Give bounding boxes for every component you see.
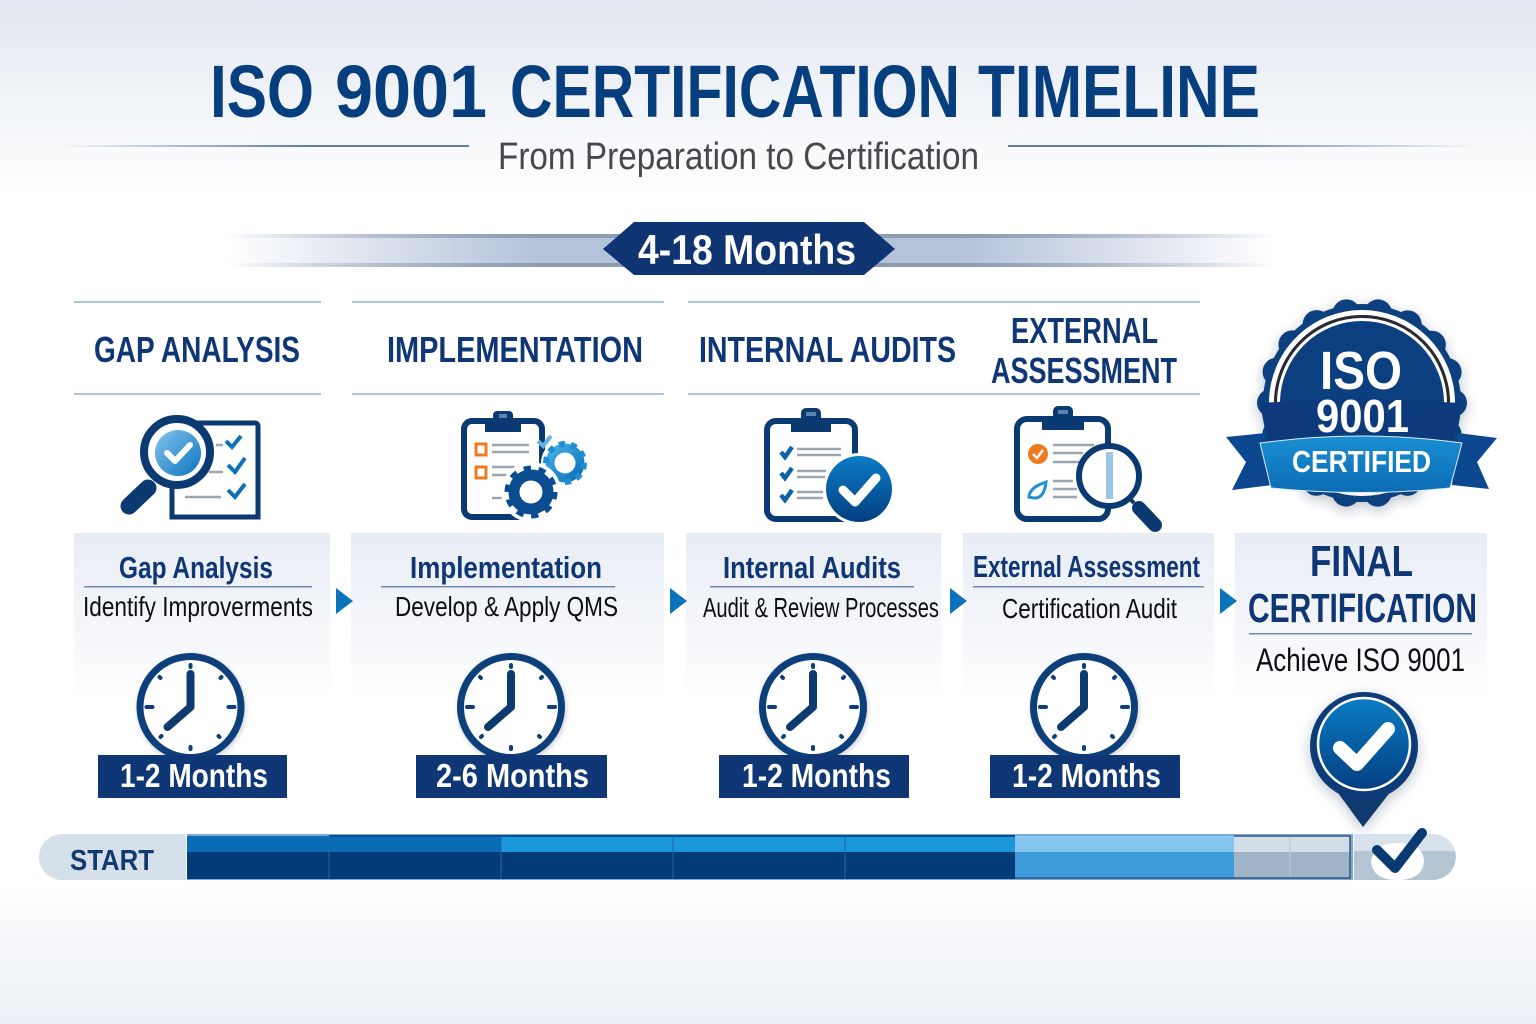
panel: implementation: Implementation <box>410 550 602 585</box>
panel: implementation: Develop & Apply QMS <box>395 591 618 622</box>
panel: internal audits: Internal Audits <box>723 550 901 585</box>
total duration banner <box>225 222 1275 275</box>
clock and duration: gap analysis <box>98 656 287 798</box>
clock and duration: external assessment: 1-2 Months <box>1012 757 1161 794</box>
panel: gap analysis <box>74 533 330 703</box>
subtitle: From Preparation to Certification <box>498 136 979 178</box>
panel: gap analysis: Gap Analysis <box>119 550 273 585</box>
icon: clipboard with gears <box>464 411 589 522</box>
clock and duration: internal audits: 1-2 Months <box>742 757 891 794</box>
heading: external assessment: EXTERNAL <box>1011 310 1158 351</box>
panel: external assessment: Certification Audit <box>1002 593 1177 624</box>
title: ISO <box>210 50 314 133</box>
title: 9001 <box>335 50 487 133</box>
icon: location pin with check <box>1310 692 1418 827</box>
clock and duration: implementation: 2-6 Months <box>436 757 589 794</box>
seal text: 9001: 9001 <box>1316 390 1409 442</box>
icon: clipboard with check badge <box>767 408 895 525</box>
heading: implementation: IMPLEMENTATION <box>387 329 643 370</box>
arrow 4 <box>1220 588 1237 614</box>
clock and duration: external assessment <box>990 656 1180 798</box>
bar segments <box>187 834 1353 880</box>
heading: gap analysis: GAP ANALYSIS <box>94 329 300 370</box>
seal text: certified: CERTIFIED <box>1292 444 1431 479</box>
arrow 3 <box>950 588 967 614</box>
heading: internal audits: INTERNAL AUDITS <box>699 329 956 370</box>
start cap: START <box>70 845 154 877</box>
icon: certified seal <box>1226 304 1497 502</box>
heading: external assessment: ASSESSMENT <box>991 350 1177 391</box>
arrow 1 <box>336 588 353 614</box>
finish cap with check <box>1354 833 1456 880</box>
panel: implementation <box>351 533 664 703</box>
icon: clipboard with magnifier <box>1017 406 1155 525</box>
total duration banner: 4-18 Months <box>638 226 856 273</box>
clock and duration: gap analysis: 1-2 Months <box>120 757 268 794</box>
phase headings <box>74 301 1200 395</box>
seal text: ISO: ISO <box>1320 341 1402 401</box>
panel: internal audits <box>686 533 941 703</box>
panel: final certification: FINAL <box>1310 537 1413 586</box>
start cap <box>39 834 186 880</box>
panel: internal audits: Audit & Review Processes <box>703 592 939 623</box>
arrow 2 <box>670 588 687 614</box>
heading: external assessment <box>991 310 1177 391</box>
panel: final certification: Achieve ISO 9001 <box>1256 642 1465 678</box>
panel: final certification <box>1235 533 1487 703</box>
panel: gap analysis: Identify Improverments <box>83 591 313 622</box>
clock and duration: implementation <box>416 656 607 798</box>
timeline progress bar <box>39 833 1456 880</box>
title <box>210 50 1260 133</box>
title: TIMELINE <box>978 50 1260 133</box>
clock and duration: internal audits <box>719 656 909 798</box>
title: CERTIFICATION <box>510 50 960 133</box>
icon: magnifier over checklist <box>129 419 258 517</box>
panel: external assessment <box>963 533 1214 703</box>
panel: external assessment: External Assessment <box>973 549 1200 584</box>
